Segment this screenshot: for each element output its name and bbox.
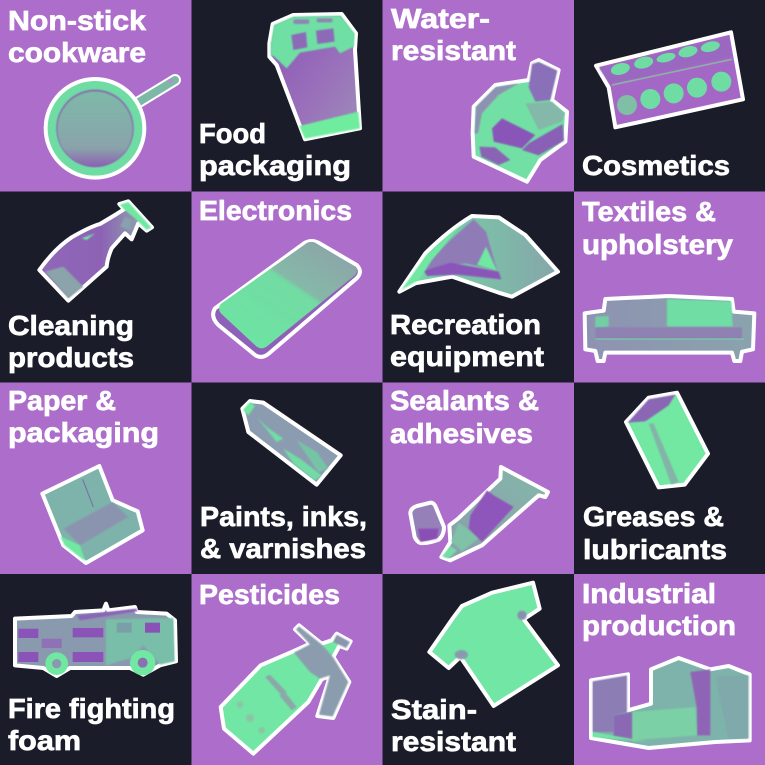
panel: Electronics	[192, 192, 382, 382]
panel: Cosmetics	[574, 0, 765, 192]
icon: plastic bag	[473, 60, 567, 182]
panel: Sealants & adhesives	[382, 382, 574, 574]
icon: t-shirt	[429, 583, 558, 706]
heading: Stain-resistant: Stain-	[391, 694, 477, 725]
panel: Non-stick cookware	[0, 0, 192, 192]
icon: fire engine	[15, 604, 176, 676]
heading: Water-resistant: resistant	[391, 35, 516, 66]
icon: sofa	[585, 296, 754, 361]
heading: Non-stick cookware: cookware	[8, 37, 146, 68]
heading: Paper & packaging: packaging	[8, 417, 159, 448]
heading: Recreation equipment: equipment	[390, 341, 544, 372]
heading: Sealants & adhesives: Sealants &	[390, 385, 539, 416]
heading: Stain-resistant	[391, 694, 516, 757]
icon: tent	[399, 216, 558, 297]
heading: Water-resistant	[391, 3, 516, 66]
heading: Greases & lubricants: Greases &	[583, 501, 724, 532]
heading: Fire fighting foam	[8, 693, 175, 756]
icon: adhesive tube and cap	[410, 467, 548, 560]
heading: Recreation equipment	[390, 309, 544, 372]
heading: Industrial production: production	[582, 610, 736, 641]
heading: Pesticides: Pesticides	[199, 579, 340, 610]
heading: Textiles & upholstery: upholstery	[582, 229, 733, 260]
heading: Industrial production	[582, 578, 736, 641]
heading: Paper & packaging	[8, 385, 159, 448]
heading: Cleaning products: Cleaning	[8, 310, 134, 341]
panel: Cleaning products	[0, 192, 192, 382]
panel: Pesticides	[192, 574, 382, 765]
heading: Food packaging: packaging	[199, 150, 351, 181]
heading: Paints, inks, & varnishes	[200, 501, 367, 564]
panel: Industrial production	[574, 574, 765, 765]
heading: Cosmetics: Cosmetics	[582, 150, 730, 181]
icon: pressure sprayer	[221, 625, 351, 754]
heading: Sealants & adhesives	[390, 385, 539, 449]
heading: Textiles & upholstery: Textiles &	[582, 196, 716, 227]
heading: Recreation equipment: Recreation	[390, 309, 541, 340]
heading: Paints, inks, & varnishes: & varnishes	[200, 533, 366, 564]
heading: Fire fighting foam: Fire fighting	[8, 693, 175, 724]
heading: Electronics: Electronics	[199, 195, 352, 226]
heading: Non-stick cookware: Non-stick	[8, 5, 146, 36]
heading: Cleaning products	[8, 310, 134, 373]
heading: Food packaging: Food	[199, 118, 266, 149]
panel: Paper & packaging	[0, 382, 192, 574]
icon: spray paint can	[242, 401, 341, 485]
panel: Water-resistant	[382, 0, 574, 192]
panel: Fire fighting foam	[0, 574, 192, 765]
heading: Food packaging	[199, 118, 351, 181]
panel: Food packaging	[192, 0, 382, 192]
heading: Greases & lubricants: lubricants	[583, 534, 727, 565]
heading: Cleaning products: products	[8, 342, 134, 373]
icon: eyeshadow palette	[596, 32, 743, 127]
icon: oil can	[626, 393, 708, 487]
panel: Stain-resistant	[382, 574, 574, 765]
panel: Greases & lubricants	[574, 382, 765, 574]
heading: Sealants & adhesives: adhesives	[390, 418, 533, 449]
heading: Fire fighting foam: foam	[8, 725, 81, 756]
heading: Textiles & upholstery	[582, 196, 733, 260]
panel: Paints, inks & varnishes	[192, 382, 382, 574]
heading: Stain-resistant: resistant	[391, 726, 516, 757]
panel: Recreation equipment	[382, 192, 574, 382]
heading: Paper & packaging: Paper &	[8, 385, 116, 416]
heading: Industrial production: Industrial	[582, 578, 716, 609]
icon: smartphone	[213, 241, 360, 357]
icon: takeaway coffee cup	[269, 14, 360, 139]
heading: Greases & lubricants	[583, 501, 727, 565]
panel: Textiles & upholstery	[574, 192, 765, 382]
icon: factory silos	[591, 658, 750, 748]
heading: Non-stick cookware	[8, 5, 146, 68]
icon: cardboard box	[42, 466, 143, 563]
heading: Water-resistant: Water-	[391, 3, 490, 34]
heading: Paints, inks, & varnishes: Paints, inks,	[200, 501, 367, 532]
icon: spray bottle	[39, 201, 152, 301]
icon: frying pan	[46, 79, 175, 178]
